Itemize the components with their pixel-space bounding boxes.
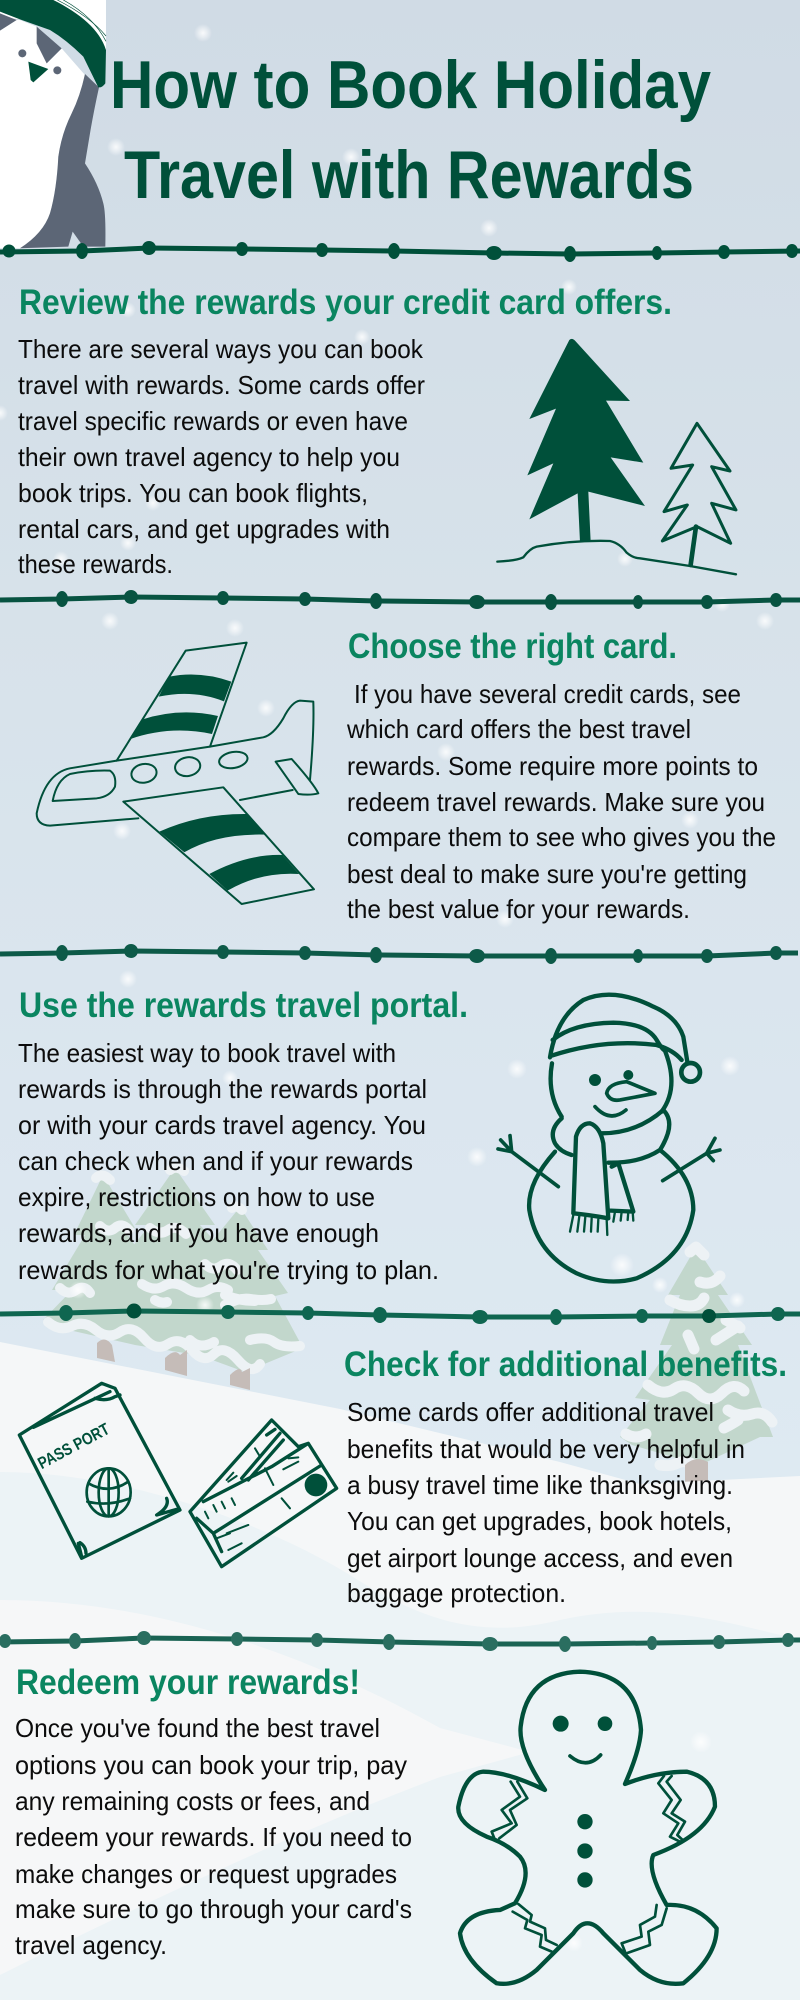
divider garland 4 [0,1304,800,1325]
icon: plane tickets [190,1420,337,1567]
section 1: body text [18,334,425,579]
divider garland 5 [0,1631,800,1652]
background: faded pine trees [43,1168,773,1484]
icon: gingerbread man [458,1672,717,1984]
divider garland 3 [0,944,798,964]
icon: passport [19,1383,180,1558]
divider garland 2 [0,590,800,610]
section 3: body text: rewards is through the rewards portal [18,1074,427,1104]
section 4: body text: a busy travel time like thanksgiving. [347,1470,733,1500]
section 3: body text: rewards for what you're trying to plan. [18,1255,439,1285]
section 1: body text: these rewards. [18,549,173,579]
section 3: body text: The easiest way to book travel with [18,1038,396,1068]
section 5: body text: options you can book your trip, pay [15,1750,407,1780]
airplane: upper wing [117,643,247,761]
penguin: green hat band [0,0,106,87]
section 3: heading: Use the rewards travel portal. [19,986,468,1025]
airplane: tail stabilizer [276,759,318,795]
section 1: body text: travel with rewards. Some cards offer [18,370,425,400]
title: How to Book Holiday [110,47,711,123]
section 4: body text: You can get upgrades, book hotels, [347,1506,732,1536]
section 1: body text: travel specific rewards or even have [18,406,408,436]
snowman: arms [498,1136,720,1187]
background: tree trunks [97,1339,708,1484]
section 3: body text: or with your cards travel agency. You [18,1110,426,1140]
section 2: body text: which card offers the best travel [346,714,691,744]
penguin: white corner and belly [0,0,106,50]
airplane: windows [53,750,249,801]
section 3: body text: expire, restrictions on how to use [18,1182,375,1212]
section 1: heading: Review the rewards your credit card offers. [19,283,672,322]
airplane: lower wing [123,787,314,904]
section 2: body text: the best value for your rewards. [347,894,690,924]
section 5: body text: any remaining costs or fees, and [15,1786,370,1816]
background: snowy ground [0,1342,800,2000]
passport: globe [87,1468,131,1516]
gingerbread: icing [492,1776,685,1953]
section 2: body text [346,679,776,924]
gingerbread: outline [458,1672,717,1984]
icon: snowman with santa hat [498,995,720,1282]
section 5: body text [15,1713,412,1960]
section 5: heading: Redeem your rewards! [16,1663,360,1702]
section 4: body text: get airport lounge access, and even [347,1543,733,1573]
penguin: hat thin lines [57,0,106,41]
gingerbread: buttons [577,1814,593,1829]
title [110,47,711,213]
section 5: body text: make changes or request upgrades [15,1859,397,1889]
section 2: body text: rewards. Some require more points to [347,751,758,781]
section 3: body text: rewards, and if you have enough [18,1218,379,1248]
section 2: heading: Choose the right card. [348,627,677,666]
icon: striped airplane [37,643,318,904]
gingerbread: eyes [553,1716,569,1732]
section 5: body text: redeem your rewards. If you need to [15,1822,412,1852]
passport: label: PASS PORT [35,1419,113,1473]
penguin illustration [0,0,106,248]
section 2: body text: compare them to see who gives you the [347,822,776,852]
snowman: hat [550,995,687,1062]
section 3: body text [18,1038,439,1285]
section 3: body text: can check when and if your rewards [18,1146,413,1176]
section 1: body text: There are several ways you can book [18,334,424,364]
section 4: body text: benefits that would be very helpful in [347,1434,745,1464]
snowman: face [589,1074,601,1086]
snowman: body [529,1150,693,1282]
icon: pine trees on a hill [497,339,736,574]
penguin: eyes [18,49,61,74]
section 5: body text: Once you've found the best travel [15,1713,380,1743]
divider garland 1 [0,241,800,262]
airplane: fuselage [37,701,313,826]
section 2: body text: If you have several credit cards, see [354,679,741,709]
penguin: beak [28,62,48,82]
section 5: body text: make sure to go through your card's [15,1894,412,1924]
snowman: head [551,1048,671,1117]
section 4: body text: baggage protection. [347,1578,566,1608]
section 1: body text: book trips. You can book flights, [18,478,368,508]
section 2: body text: best deal to make sure you're getting [347,859,747,889]
section 4: body text: Some cards offer additional travel [347,1397,714,1427]
section 5: body text: travel agency. [15,1930,167,1960]
gingerbread: smile [570,1755,601,1763]
section 2: body text: redeem travel rewards. Make sure you [347,787,765,817]
section 1: body text: their own travel agency to help you [18,442,400,472]
snowman: scarf [553,1110,669,1163]
title: Travel with Rewards [124,137,694,213]
section 4: body text [347,1397,745,1608]
section 1: body text: rental cars, and get upgrades with [18,514,390,544]
penguin: grey body [0,13,105,248]
